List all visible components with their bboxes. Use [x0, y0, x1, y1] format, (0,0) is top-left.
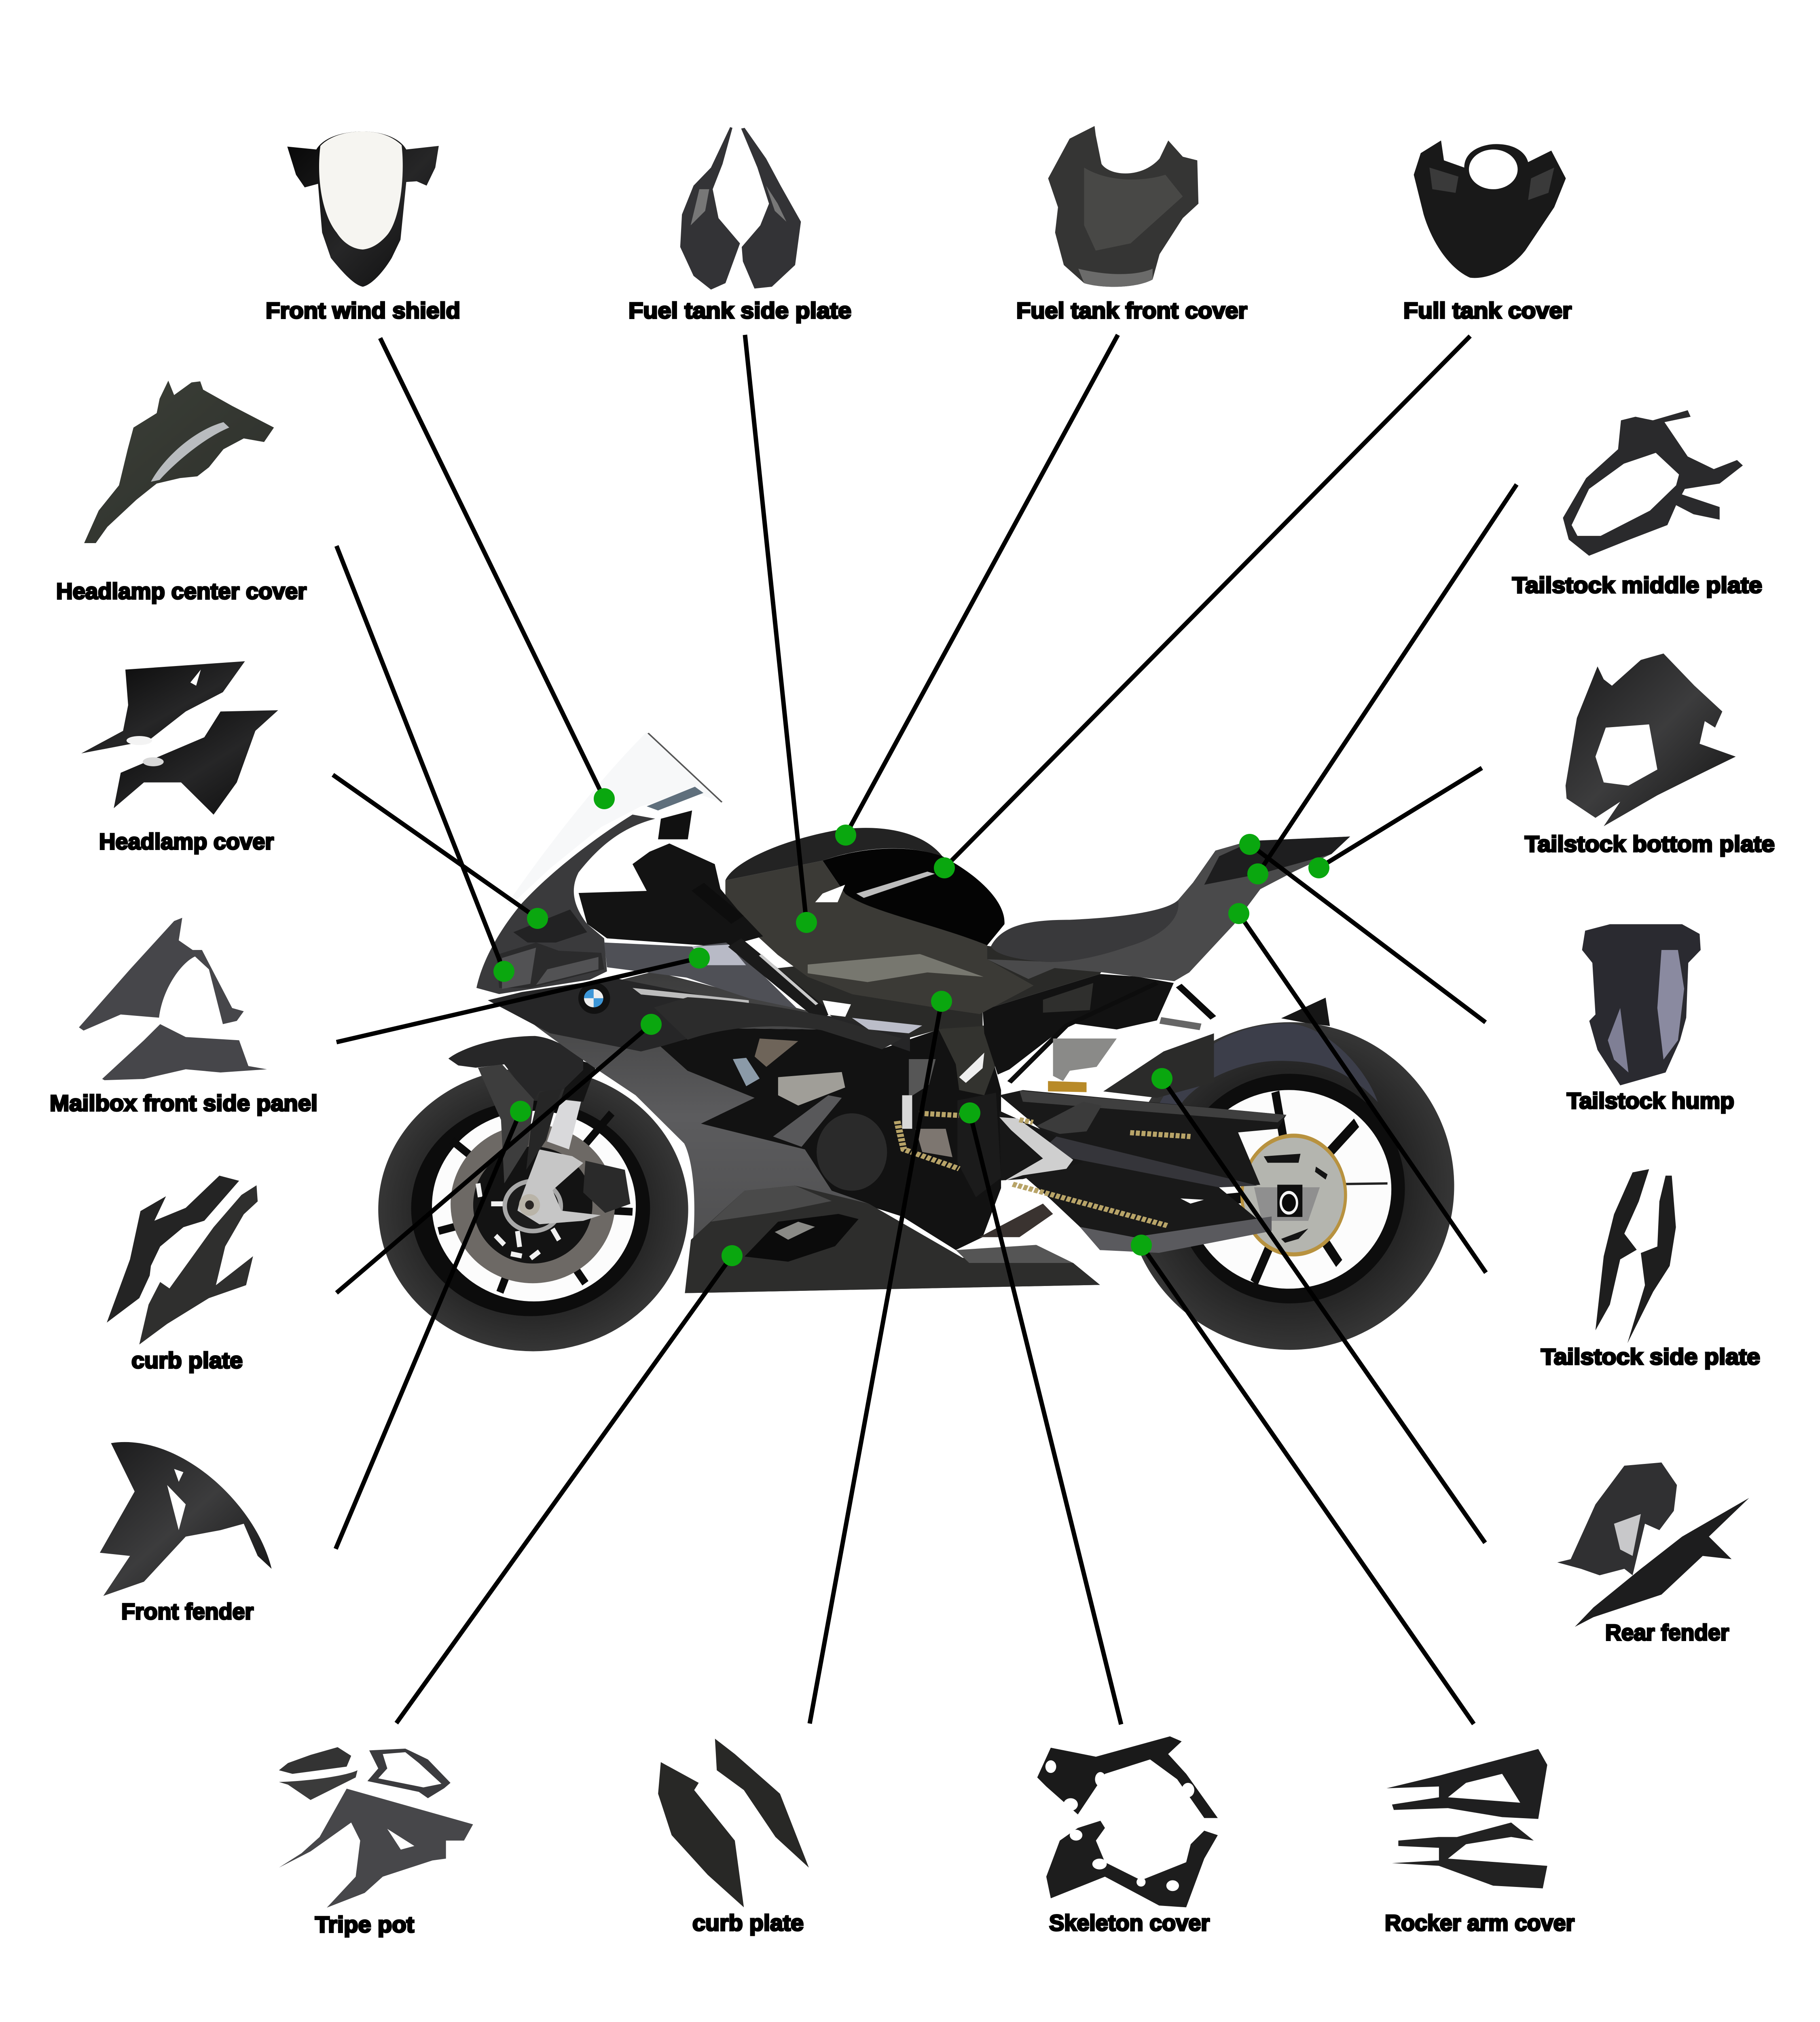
- part: curb plate left: [107, 1176, 258, 1345]
- part: front fender: [100, 1442, 272, 1596]
- line: rocker arm cover: [1141, 1245, 1474, 1724]
- line: tailstock bottom plate: [1319, 768, 1482, 868]
- part: full tank cover: [1414, 140, 1566, 278]
- line: mailbox front side panel: [336, 958, 699, 1042]
- label: tailstock side plate: Tailstock side plate: [1541, 1344, 1760, 1369]
- label: headlamp cover: Headlamp cover: [99, 829, 274, 854]
- engine backdrop: [654, 1026, 1001, 1250]
- line: tailstock middle plate: [1258, 484, 1517, 874]
- rear wheel: [1126, 998, 1454, 1350]
- label: curb plate left: curb plate: [131, 1347, 243, 1373]
- label: front fender: Front fender: [121, 1599, 254, 1624]
- line: headlamp cover: [333, 775, 538, 918]
- frame bracket: [938, 1026, 998, 1095]
- green marker dots: [493, 788, 1329, 1266]
- chin pan: [685, 1186, 1100, 1293]
- line: rear fender: [1162, 1079, 1485, 1543]
- drive chain: [897, 1113, 1191, 1226]
- ABS ring and hub: [505, 1181, 561, 1231]
- line: curb plate bottom: [810, 1001, 942, 1724]
- swingarm: [999, 1090, 1287, 1253]
- label: fuel tank front cover: Fuel tank front cover: [1016, 298, 1247, 323]
- mid-body carbon behind tank and seat: [771, 945, 1107, 1040]
- line: tailstock hump: [1250, 844, 1486, 1022]
- BMW roundel: [578, 983, 610, 1014]
- part: fuel tank side plate: [680, 127, 801, 290]
- line: fuel tank side plate: [745, 335, 806, 922]
- line: fuel tank front cover: [846, 335, 1118, 835]
- label: tailstock middle plate: Tailstock middle plate: [1512, 572, 1762, 598]
- leader lines: [333, 335, 1517, 1724]
- silver panel overlay: [852, 1018, 922, 1033]
- label: rear fender: Rear fender: [1605, 1620, 1729, 1645]
- rear subframe: [983, 974, 1174, 1074]
- engine and rear frame, swingarm: [654, 945, 1287, 1253]
- line: headlamp center cover: [336, 546, 504, 971]
- motorcycle: [378, 732, 1454, 1352]
- part: rear fender: [1557, 1462, 1749, 1627]
- part: skeleton cover: [1037, 1736, 1218, 1907]
- line: skeleton cover: [970, 1113, 1121, 1724]
- part: headlamp cover: [81, 661, 278, 814]
- part: tailstock side plate: [1596, 1169, 1676, 1343]
- part: rocker arm cover: [1386, 1749, 1547, 1889]
- linkage: [999, 1117, 1073, 1181]
- fuel tank: [726, 828, 1034, 1014]
- part: front wind shield: [287, 131, 439, 287]
- rear shock: [1053, 1038, 1117, 1081]
- label: headlamp center cover: Headlamp center cover: [56, 578, 307, 604]
- carbon band overlay: [654, 997, 902, 1049]
- cockpit, fairing and windshield: [476, 732, 910, 1051]
- part: headlamp center cover: [84, 381, 274, 543]
- lower fairing: [512, 971, 1100, 1293]
- part: curb plate bottom: [658, 1739, 809, 1907]
- line: full tank cover: [944, 336, 1470, 868]
- front fender: [449, 1036, 583, 1102]
- label: tailstock hump: Tailstock hump: [1567, 1088, 1734, 1113]
- brake caliper: [583, 1161, 631, 1213]
- front wheel: [378, 1036, 688, 1352]
- fork lug: [517, 1149, 601, 1224]
- air scoop: [745, 1214, 859, 1262]
- part: mailbox front side panel: [79, 918, 267, 1080]
- line: tailstock side plate: [1239, 914, 1486, 1273]
- rear sprocket: [1242, 1136, 1346, 1254]
- line: tripe pot: [396, 1256, 732, 1723]
- windshield: [508, 732, 722, 905]
- mirror and controls: [658, 810, 692, 840]
- label: full tank cover: Full tank cover: [1403, 298, 1572, 323]
- label: tripe pot: Tripe pot: [315, 1912, 414, 1937]
- exhaust: [979, 1203, 1053, 1237]
- line: curb plate left: [336, 1024, 651, 1293]
- tank side panel: [604, 943, 797, 1009]
- label: skeleton cover: Skeleton cover: [1049, 1910, 1210, 1935]
- labels: [50, 298, 1775, 1937]
- tail section: [987, 837, 1350, 981]
- front brake disc: [451, 1124, 615, 1283]
- label: fuel tank side plate: Fuel tank side plate: [629, 298, 851, 323]
- label: tailstock bottom plate: Tailstock bottom plate: [1525, 831, 1775, 857]
- label: curb plate bottom: curb plate: [692, 1910, 804, 1935]
- label: front wind shield: Front wind shield: [266, 298, 460, 323]
- side fairing band: [488, 977, 910, 1051]
- engine metal detail: [755, 1038, 798, 1067]
- windshield sticker: [647, 787, 703, 810]
- line: front wind shield: [380, 338, 604, 799]
- belly plate: [956, 1245, 1073, 1263]
- part: tailstock bottom plate: [1566, 654, 1736, 826]
- part: tailstock hump: [1582, 924, 1701, 1085]
- line: front fender: [336, 1111, 521, 1549]
- rear hugger: [1103, 1033, 1214, 1098]
- label: rocker arm cover: Rocker arm cover: [1385, 1910, 1575, 1935]
- fork legs: [547, 1100, 581, 1149]
- upper fairing: [476, 814, 655, 994]
- label: mailbox front side panel: Mailbox front side panel: [50, 1090, 317, 1116]
- part: tripe pot: [279, 1747, 473, 1908]
- part: fuel tank front cover: [1048, 126, 1198, 287]
- part: tailstock middle plate: [1563, 410, 1743, 556]
- seat: [991, 900, 1179, 962]
- frame spar: [734, 943, 825, 1017]
